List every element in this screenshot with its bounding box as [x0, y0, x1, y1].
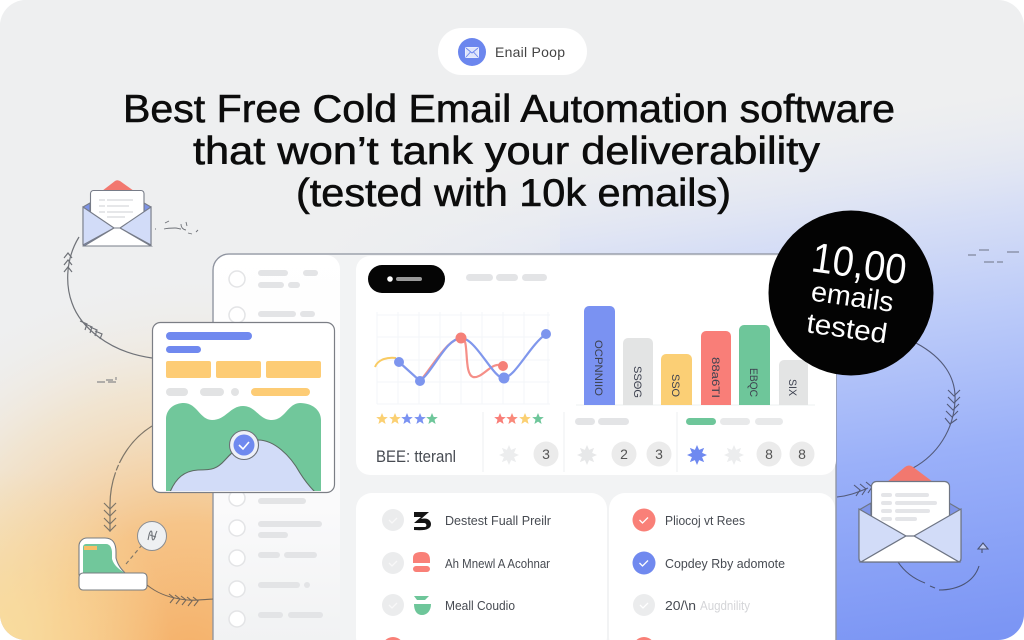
line chart — [375, 312, 551, 404]
bar labels: SSO — [669, 374, 681, 397]
callout: 10,00 emails tested: tested — [805, 307, 889, 349]
status circles — [632, 508, 656, 640]
bar labels — [592, 340, 798, 398]
title: Best Free Cold Email Automation software — [123, 88, 895, 131]
title: that won’t tank your deliverability — [193, 130, 821, 173]
icon row — [499, 442, 814, 466]
decorative dash marks right — [968, 250, 1019, 262]
icon row: 8 — [765, 446, 773, 462]
black status pill — [368, 265, 445, 293]
yellow cells — [166, 361, 321, 378]
badge: Enail Poop — [438, 28, 587, 75]
bar labels: 88a6TI — [709, 357, 721, 398]
badge label: Enail Poop — [495, 44, 565, 60]
title — [123, 88, 895, 215]
bar chart — [576, 306, 815, 405]
arrow: printer to panel — [147, 585, 213, 606]
icon: envelope in blue circle — [458, 38, 486, 66]
panel: lower right checklist — [609, 493, 835, 640]
icon row: 3 — [655, 446, 663, 462]
star ratings — [376, 413, 544, 424]
row icons — [413, 512, 431, 615]
row labels: Ah Mnewl A Acohnar — [445, 557, 550, 571]
decorative dash marks left — [97, 221, 198, 382]
floating report card — [152, 322, 334, 492]
header pills — [466, 274, 547, 281]
arrow: badge to envelope — [913, 343, 960, 468]
dashboard window frame — [213, 254, 836, 640]
icon row: 3 — [542, 446, 550, 462]
bar labels: OCPNNIIO — [592, 340, 604, 396]
blue heading bars — [166, 332, 252, 340]
arrow: envelope to card — [64, 237, 152, 358]
row labels — [445, 514, 551, 613]
area chart — [166, 403, 321, 492]
callout: 10,00 emails tested — [768, 210, 934, 376]
arrow: panel to envelope — [837, 482, 872, 497]
arrow: card to printer — [104, 426, 152, 538]
row labels: Copdey Rby adomote — [665, 557, 785, 571]
panel: sidebar list — [214, 255, 340, 640]
arrow: loop below envelope — [898, 543, 988, 590]
row labels — [665, 514, 785, 613]
check circles — [382, 509, 404, 616]
sidebar rows — [229, 271, 245, 627]
row labels: Augdnility — [700, 599, 751, 613]
bar labels: SSΘG — [631, 366, 643, 398]
panel: lower left checklist — [356, 493, 607, 640]
row labels: Meall Coudio — [445, 599, 515, 613]
legend pills — [575, 418, 783, 425]
icon: envelope top left — [83, 180, 151, 246]
row labels: Pliocoj vt Rees — [665, 514, 745, 528]
panel: analytics card — [356, 256, 836, 475]
title: (tested with 10k emails) — [296, 172, 731, 215]
icon row: 8 — [798, 446, 806, 462]
callout: 10,00 emails tested: 10,00 — [809, 233, 910, 293]
check badge — [230, 430, 258, 460]
icon: signature circle — [126, 522, 166, 564]
callout: 10,00 emails tested: emails — [809, 276, 896, 318]
icon: envelope right — [859, 466, 961, 562]
sub-card dividers — [483, 412, 677, 472]
meta pills — [166, 388, 310, 396]
bar labels: SIX — [786, 379, 798, 397]
row labels: 20/\n — [665, 599, 696, 613]
row labels: Destest Fuall Preilr — [445, 514, 551, 528]
card label: BEE: tteranl — [376, 447, 456, 466]
icon: printer device — [79, 538, 147, 590]
bar labels: EBQC — [747, 368, 759, 397]
icon row: 2 — [620, 446, 628, 462]
